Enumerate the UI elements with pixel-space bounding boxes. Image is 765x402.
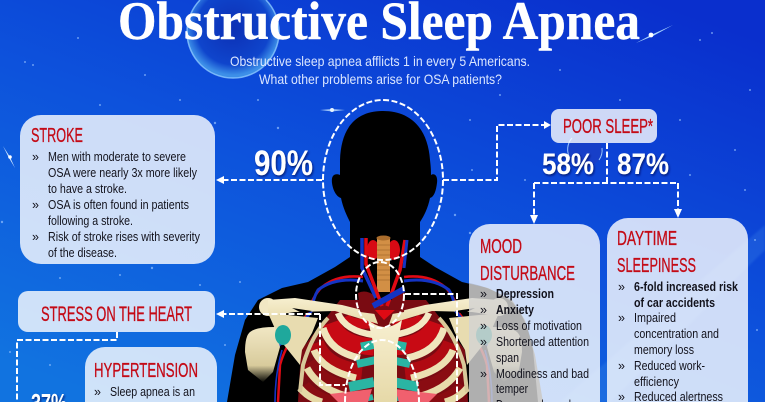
human silhouette bbox=[227, 111, 543, 402]
panel: daytime sleepiness: Impaired bbox=[634, 311, 676, 325]
trachea bbox=[377, 237, 390, 292]
panel: mood disturbance bbox=[469, 224, 600, 402]
subtitle bbox=[230, 53, 530, 87]
panel: hypertension: Sleep apnea is an bbox=[110, 385, 195, 399]
panel: mood disturbance: » bbox=[480, 303, 487, 317]
subtitle: What other problems arise for OSA patients? bbox=[259, 71, 502, 87]
panel: hypertension: HYPERTENSION bbox=[94, 360, 198, 382]
panel: mood disturbance: » bbox=[480, 287, 487, 301]
panel: daytime sleepiness: » bbox=[618, 311, 625, 325]
connector: stress on the heart to 37% bbox=[17, 332, 117, 402]
panel: stroke: to have a stroke. bbox=[48, 182, 127, 196]
panel: stroke bbox=[20, 115, 215, 264]
panel: mood disturbance: Shortened attention bbox=[496, 335, 589, 349]
panel: daytime sleepiness: DAYTIME bbox=[617, 228, 677, 250]
panel: stroke: following a stroke. bbox=[48, 214, 133, 228]
sternum bbox=[368, 320, 402, 402]
dashed focus circle: head bbox=[323, 100, 443, 260]
sparkling stars bbox=[3, 25, 673, 168]
stat: 58%: 58% bbox=[542, 148, 594, 181]
panel: mood disturbance: Anxiety bbox=[496, 303, 534, 317]
chest cavity bbox=[298, 300, 468, 402]
decorative moon behind title bbox=[187, 0, 279, 78]
left half of skeleton and vessels bbox=[245, 276, 378, 402]
stat: 87%: 87% bbox=[617, 148, 669, 181]
connector: head to stroke bbox=[216, 176, 322, 184]
panel: stroke: OSA is often found in patients bbox=[48, 198, 189, 212]
panel: stroke: » bbox=[32, 150, 39, 164]
panel: stroke: » bbox=[32, 198, 39, 212]
anatomy: skeleton, organs and vessels bbox=[245, 236, 522, 402]
panel: mood disturbance: span bbox=[496, 351, 519, 365]
panel: mood disturbance: temper bbox=[496, 382, 528, 396]
dashed focus circle: heart bbox=[356, 262, 404, 328]
panel: daytime sleepiness: memory loss bbox=[634, 343, 694, 357]
panel: stroke: Risk of stroke rises with severity bbox=[48, 230, 201, 244]
panel: daytime sleepiness: » bbox=[618, 280, 625, 294]
panel: stress on the heart: STRESS ON THE HEART bbox=[41, 303, 192, 326]
decorative small moon behind percentages bbox=[568, 133, 602, 167]
panel: mood disturbance: » bbox=[480, 367, 487, 381]
panel: mood disturbance: Loss of motivation bbox=[496, 319, 582, 333]
panel: daytime sleepiness bbox=[607, 218, 748, 402]
panel: mood disturbance: » bbox=[480, 335, 487, 349]
panel: daytime sleepiness: » bbox=[618, 359, 625, 373]
panel: mood disturbance: » bbox=[480, 319, 487, 333]
panel: mood disturbance: Depression bbox=[496, 287, 554, 301]
panel: daytime sleepiness: SLEEPINESS bbox=[617, 255, 696, 277]
panel: poor sleep: POOR SLEEP* bbox=[563, 116, 653, 138]
connector: head to poor sleep bbox=[443, 121, 551, 180]
panel: mood disturbance: Moodiness and bad bbox=[496, 367, 589, 381]
panel: mood disturbance: MOOD bbox=[480, 236, 522, 258]
panel: daytime sleepiness: concentration and bbox=[634, 327, 719, 341]
panel: stress on the heart bbox=[18, 291, 215, 332]
panel: daytime sleepiness: 6-fold increased risk bbox=[634, 280, 738, 294]
subtitle: Obstructive sleep apnea afflicts 1 in every 5 Americans. bbox=[230, 53, 530, 69]
connector: poor sleep split bbox=[530, 143, 682, 224]
panel: hypertension: » bbox=[94, 385, 101, 399]
panel: mood disturbance: DISTURBANCE bbox=[480, 263, 575, 285]
panel: stroke: Men with moderate to severe bbox=[48, 150, 186, 164]
heart lobes bbox=[358, 292, 375, 314]
right half of skeleton and vessels bbox=[389, 276, 522, 402]
panel: stroke: » bbox=[32, 230, 39, 244]
neck vessels and aorta bbox=[362, 238, 407, 320]
connector: heart to stress on the heart bbox=[216, 294, 457, 402]
panel: poor sleep bbox=[551, 109, 657, 143]
panel: stroke: OSA were nearly 3x more likely bbox=[48, 166, 198, 180]
panel: stroke: of the disease. bbox=[48, 246, 117, 260]
panel: stroke: STROKE bbox=[31, 125, 83, 147]
panel: daytime sleepiness: Reduced work- bbox=[634, 359, 705, 373]
thyroid bbox=[367, 240, 379, 260]
stat: 90%: 90% bbox=[254, 144, 313, 183]
dashed focus circle: abdomen bbox=[345, 340, 419, 402]
panel: daytime sleepiness: efficiency bbox=[634, 375, 680, 389]
panel: daytime sleepiness: of car accidents bbox=[634, 296, 715, 310]
panel: hypertension bbox=[85, 347, 217, 402]
